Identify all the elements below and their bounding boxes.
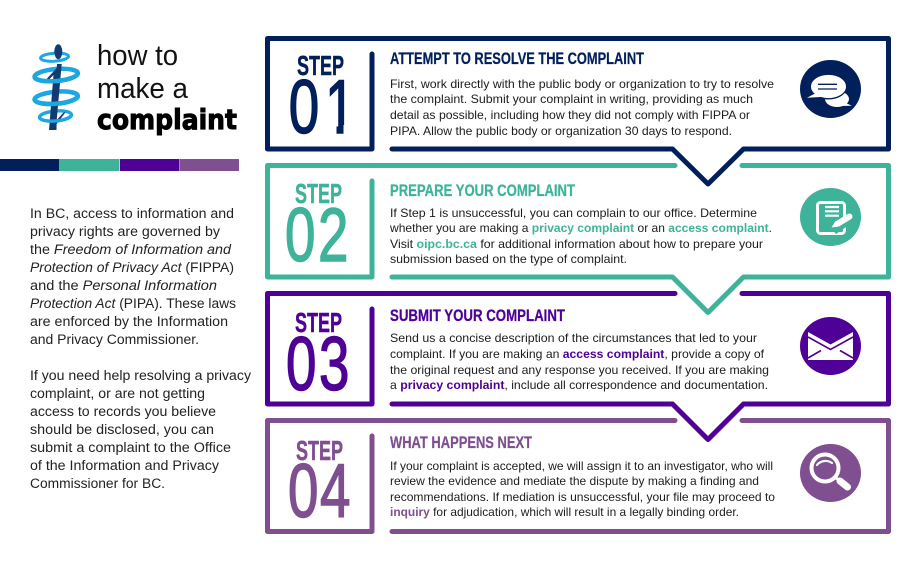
step 2 body: Visit oipc.bc.ca for additional information about how to prepare your [390,237,763,251]
intro text: Protection Act (PIPA). These laws [30,296,236,311]
intro text: and the Personal Information [30,278,217,293]
step 4 frame [268,420,888,532]
intro text: privacy rights are governed by [30,224,220,239]
step 2 body [389,206,772,266]
intro text: of the Information and Privacy [30,458,219,473]
step 4 body: recommendations. If mediation is unsuccessful, your file may proceed to [390,490,775,504]
step 2 frame [268,166,888,312]
step 2 body: whether you are making a privacy complaint or an access complaint. [389,221,772,235]
step 3 body: the original request and any response you received. If you are making [390,363,769,377]
step 4 label: 04 [288,449,350,534]
step 3 frame [268,294,888,440]
intro text: In BC, access to information and [30,206,234,221]
step 3 label: STEP [295,307,342,338]
step 3 body [390,331,769,392]
icon: magnifying glass [800,444,861,502]
step 1 frame [268,38,888,184]
step 1 body: detail as possible, including how they did not comply with FIPPA or [390,108,750,122]
intro text: the Freedom of Information and [30,242,232,257]
intro text: complaint, or are not getting [30,386,205,401]
colour bar [0,159,239,171]
intro text: should be disclosed, you can [30,422,214,437]
step 4 heading: WHAT HAPPENS NEXT [390,434,532,452]
step 2 body: If Step 1 is unsuccessful, you can complain to our office. Determine [390,206,757,220]
intro text: are enforced by the Information [30,314,228,329]
step 3 label: 03 [286,322,349,407]
icon: speech bubbles [800,60,861,118]
logo: information symbol [34,44,78,130]
step 3 heading: SUBMIT YOUR COMPLAINT [390,307,565,325]
title [97,40,237,136]
step 1 body: PIPA. Allow the public body or organization 30 days to respond. [390,124,732,138]
step 1 label: 01 [289,65,355,150]
title: how to [97,40,178,72]
step 1 body: First, work directly with the public body or organization to try to resolve [390,77,774,91]
step 2 label: STEP [295,178,342,209]
step 3 body: Send us a concise description of the circumstances that led to your [390,331,757,345]
panel: step 3 [268,294,888,440]
step 4 body: If your complaint is accepted, we will assign it to an investigator, who will [390,459,773,473]
intro text: and Privacy Commissioner. [30,332,199,347]
intro text: submit a complaint to the Office [30,440,231,455]
step 3 body: a privacy complaint, include all correspondence and documentation. [390,378,768,392]
title: make a [97,73,189,105]
intro text: If you need help resolving a privacy [30,368,251,383]
step 2 body: submission based on the type of complaint. [390,252,627,266]
step 4 body: review the evidence and mediate the dispute by making a finding and [390,474,759,488]
panel: step 2 [268,166,888,312]
step 4 body [390,459,775,519]
step 3 body: complaint. If you are making an access complaint, provide a copy of [390,347,765,361]
step 4 body: inquiry for adjudication, which will result in a legally binding order. [390,505,739,519]
step 1 body [390,77,774,138]
step 4 label: STEP [296,435,343,466]
panel: step 1 [268,38,888,184]
icon: envelope [800,317,861,375]
intro text: Commissioner for BC. [30,476,165,491]
title: complaint [97,103,237,136]
intro text: access to records you believe [30,404,216,419]
panel: step 4 [268,420,888,534]
icon: document and pencil [800,188,861,246]
step 2 heading: PREPARE YOUR COMPLAINT [390,182,575,200]
step 1 heading: ATTEMPT TO RESOLVE THE COMPLAINT [390,50,644,68]
step 1 label: STEP [297,50,344,81]
step 2 label: 02 [285,193,348,278]
step 1 body: the complaint. Submit your complaint in writing, providing as much [390,92,753,106]
intro text [30,206,251,491]
intro text: Protection of Privacy Act (FIPPA) [30,260,234,275]
